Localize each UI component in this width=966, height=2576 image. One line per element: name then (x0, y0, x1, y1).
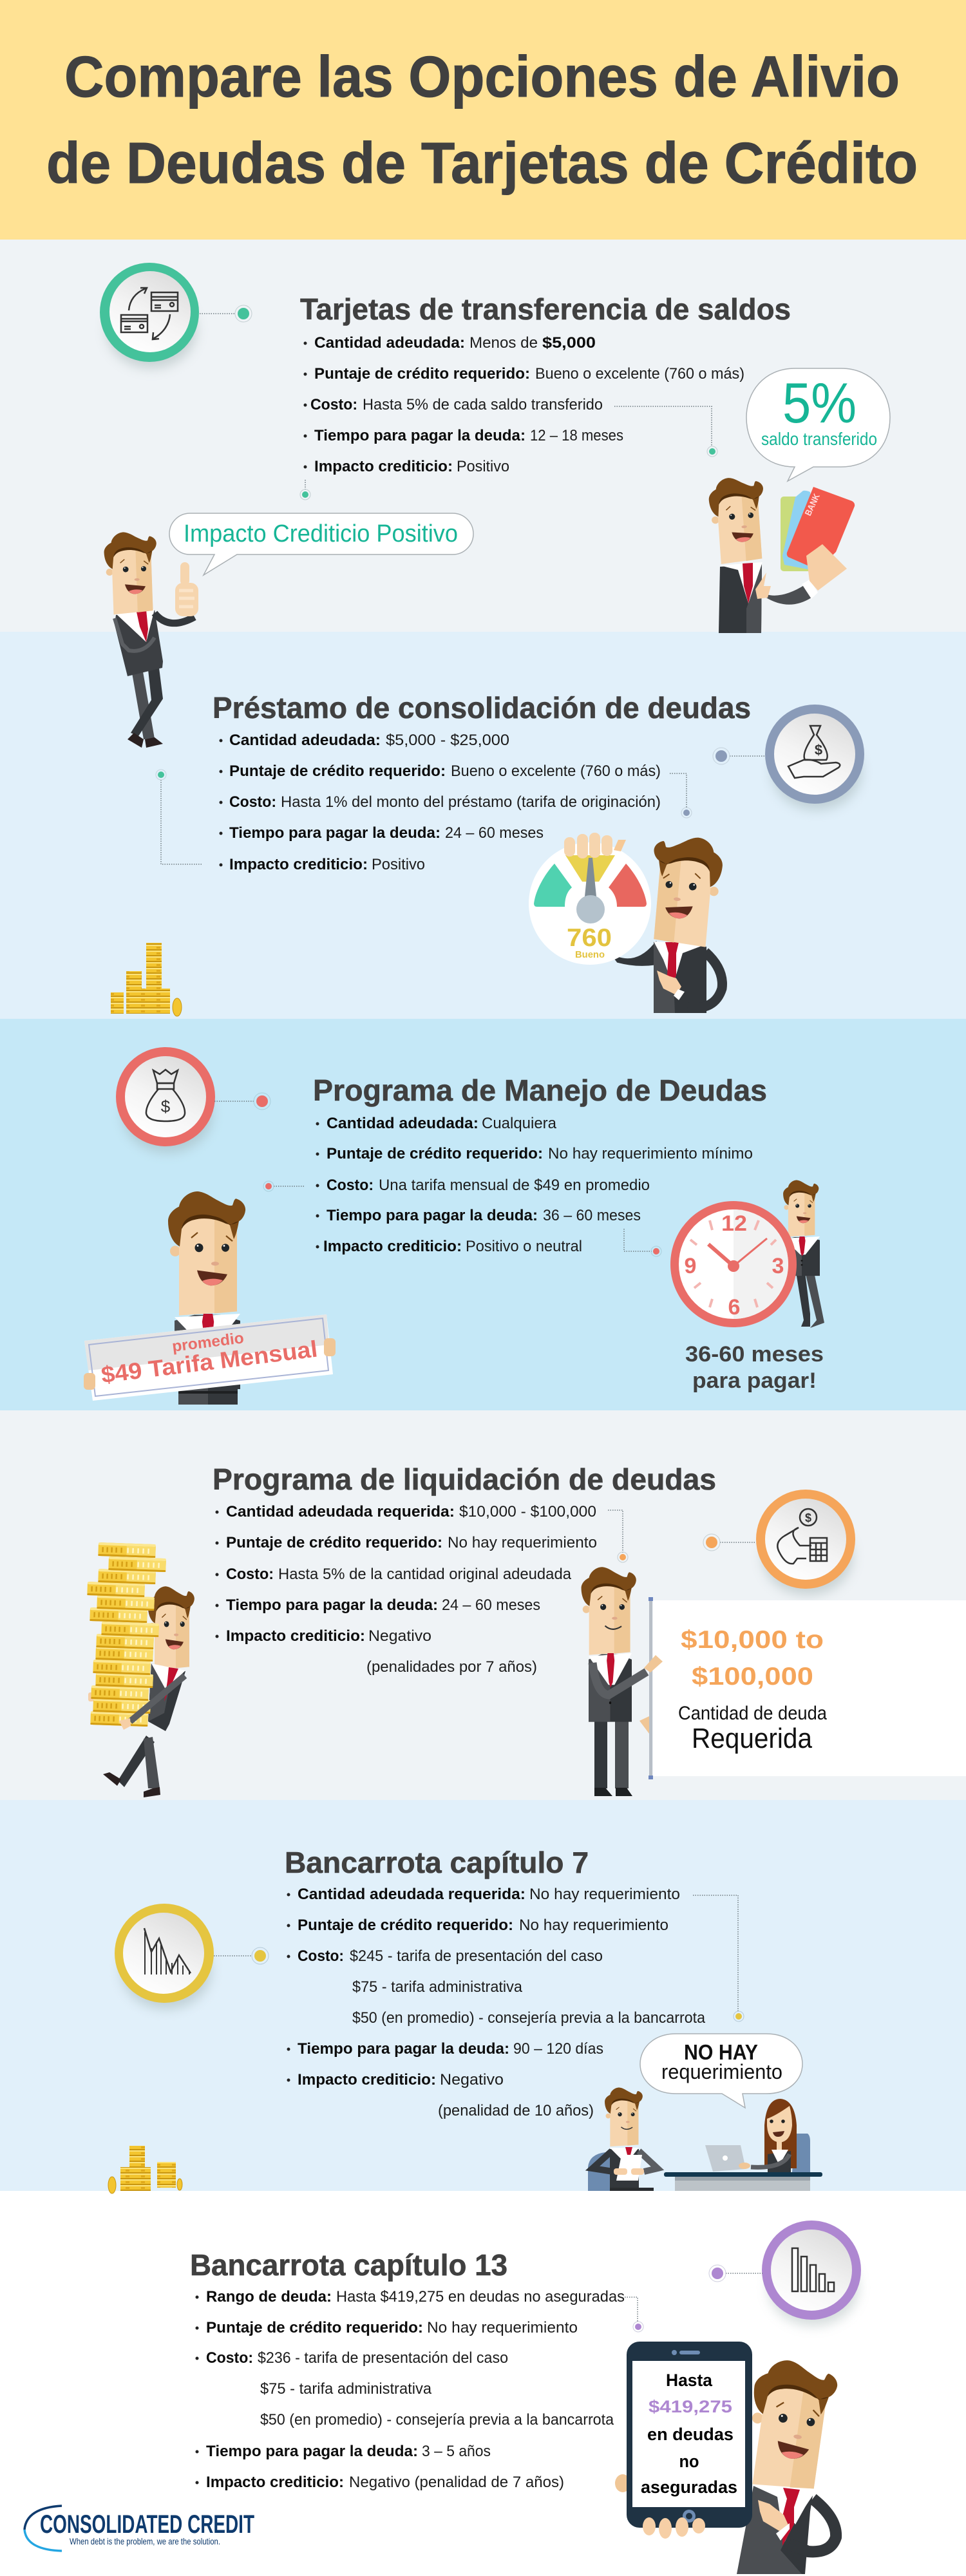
panel: bancarrota capítulo 7 (108, 1846, 822, 2193)
callout: no hay requerimiento (640, 2034, 802, 2108)
logo: Consolidated Credit (24, 2506, 254, 2551)
list: details: Una tarifa mensual de $49 en promedio (379, 1177, 650, 1194)
list: details: $50 (en promedio) - consejería previa a la bancarrota (352, 2009, 706, 2027)
list: details: Bueno o excelente (760 o más) (451, 762, 661, 780)
phone (615, 2342, 752, 2539)
character: man holding sign (168, 1191, 245, 1405)
gauge: credit score 760: 760 (567, 924, 612, 952)
list: details: Puntaje de crédito requerido: (327, 1145, 543, 1162)
logo: Consolidated Credit: When debt is the problem, we are the solution. (70, 2536, 220, 2546)
list: details (304, 334, 744, 475)
sign: $49 tarifa mensual (84, 1314, 336, 1401)
connector (200, 305, 252, 322)
coins stack (111, 943, 182, 1016)
list: details: Tiempo para pagar la deuda: (327, 1207, 538, 1224)
arm holding coins (119, 1676, 185, 1730)
callout: 5%: saldo transferido (761, 429, 877, 449)
heading: Préstamo de consolidación de deudas (213, 691, 751, 724)
list: details: Cantidad adeudada requerida: (226, 1503, 455, 1520)
list: details: Costo: (229, 793, 276, 811)
icon: bar chart (762, 2221, 861, 2326)
list: details: Tiempo para pagar la deuda: (229, 824, 440, 842)
list: details: Positivo (372, 856, 425, 873)
list: details: Impacto crediticio: (229, 856, 368, 873)
list: details: Hasta $419,275 en deudas no aseguradas (336, 2288, 625, 2306)
connector: impacto to bubble (300, 480, 310, 500)
character: man holding credit cards: BANK (802, 492, 822, 517)
list: details (196, 2288, 625, 2491)
list: details: Costo: (206, 2349, 253, 2367)
list: details: Puntaje de crédito requerido: (229, 762, 446, 780)
clock (670, 1201, 797, 1327)
list: details (215, 1503, 597, 1676)
character: man holding credit cards (708, 475, 855, 633)
list: details: Hasta 5% de la cantidad original adeudada (278, 1566, 572, 1583)
coin stack (87, 1542, 166, 1727)
logo: Consolidated Credit: CONSOLIDATED CREDIT (40, 2510, 254, 2539)
icon: piggy bank and calculator: $ (805, 1511, 811, 1524)
character: man with thumbs up (104, 531, 198, 748)
icon: falling chart (115, 1904, 214, 2009)
sign: amount required: Cantidad de deuda (678, 1703, 827, 1724)
heading: Programa de liquidación de deudas (213, 1463, 716, 1496)
callout: 5%: 5% (782, 371, 857, 435)
list: details: Tiempo para pagar la deuda: (226, 1596, 438, 1614)
connector: puntaje to gauge (670, 773, 692, 818)
list: details: 90 – 120 días (513, 2040, 603, 2058)
character: man presenting (582, 1567, 663, 1796)
list: details: Tiempo para pagar la deuda: (314, 427, 526, 444)
gauge: credit score 760: Bueno (575, 949, 605, 960)
connector: cantidad to sign (608, 1510, 628, 1562)
panel: préstamo de consolidación (111, 691, 864, 1016)
clock: 9 (685, 1254, 696, 1278)
list: details: Impacto crediticio: (226, 1627, 365, 1645)
list: details: Impacto crediticio: (298, 2071, 436, 2088)
connector: tiempo to clock (624, 1229, 661, 1256)
character: man seated (588, 2088, 658, 2191)
connector: impacto to man (156, 770, 202, 864)
character: man pointing at gauge (616, 834, 724, 1013)
clock: 6 (728, 1295, 740, 1320)
connector (703, 1534, 756, 1551)
phone: aseguradas (641, 2477, 737, 2497)
list: details: 24 – 60 meses (442, 1596, 540, 1614)
sign: amount required: Requerida (692, 1723, 812, 1754)
list: details: 36 – 60 meses (543, 1207, 641, 1224)
list: details: Impacto crediticio: (323, 1238, 462, 1255)
list: details: No hay requerimiento mínimo (548, 1145, 753, 1162)
list: details (316, 1115, 753, 1255)
list: details (287, 1886, 706, 2119)
panel: bancarrota capítulo 13 (24, 2221, 861, 2574)
panel: tarjetas de transferencia de saldos (100, 263, 890, 748)
phone: en deudas (647, 2425, 734, 2444)
list: details: Menos de (469, 334, 538, 352)
list: details: Positivo o neutral (466, 1238, 582, 1255)
list: details: Rango de deuda: (206, 2288, 332, 2306)
list: details: Costo: (327, 1177, 374, 1194)
list: details: Cantidad adeudada: (229, 732, 381, 749)
list: details: No hay requerimiento (448, 1534, 597, 1551)
list: details: 3 – 5 años (422, 2443, 491, 2460)
callout: impacto crediticio positivo: Impacto Crediticio Positivo (184, 520, 458, 547)
title: Compare las Opciones de Alivio (64, 45, 900, 109)
connector: costo (263, 1181, 305, 1191)
title (46, 45, 918, 196)
list: details: Puntaje de crédito requerido: (226, 1534, 442, 1551)
clock: 3 (772, 1254, 784, 1278)
list: details: No hay requerimiento (519, 1917, 668, 1934)
list: details (219, 732, 661, 873)
character: woman at desk (705, 2099, 810, 2172)
connector (709, 2265, 762, 2282)
sign: $49 tarifa mensual: $49 Tarifa Mensual (100, 1336, 319, 1388)
callout: no hay requerimiento: NO HAY (684, 2040, 758, 2064)
list: details: $245 - tarifa de presentación del caso (350, 1947, 603, 1965)
list: details: Negativo (penalidad de 7 años) (349, 2474, 564, 2491)
list: details: Puntaje de crédito requerido: (298, 1917, 513, 1934)
list: details: Puntaje de crédito requerido: (314, 365, 530, 383)
panel: header (0, 0, 966, 240)
panel: programa de manejo de deudas (84, 1047, 824, 1405)
list: details: No hay requerimiento (427, 2319, 578, 2336)
list: details: Puntaje de crédito requerido: (206, 2319, 423, 2336)
callout: 5% (746, 368, 890, 481)
list: details: $50 (en promedio) - consejería previa a la bancarrota (260, 2411, 614, 2429)
list: details: $5,000 (542, 334, 596, 352)
list: details: Cantidad adeudada: (314, 334, 465, 352)
sign: amount required: $10,000 to (681, 1626, 824, 1654)
list: details: $75 - tarifa administrativa (260, 2380, 432, 2398)
phone: Hasta (666, 2371, 713, 2390)
title: de Deudas de Tarjetas de Crédito (46, 131, 918, 196)
list: details: $10,000 - $100,000 (459, 1503, 596, 1520)
callout: impacto crediticio positivo (169, 513, 473, 575)
caption: 36-60 meses: 36-60 meses (685, 1342, 824, 1367)
sign: $49 tarifa mensual: promedio (171, 1329, 245, 1356)
list: details: Impacto crediticio: (206, 2474, 344, 2491)
icon: money bag: $ (161, 1097, 171, 1116)
icon: money bag (116, 1047, 215, 1153)
connector: cantidad to bubble (693, 1895, 744, 2022)
desk (664, 2172, 822, 2191)
list: details: Tiempo para pagar la deuda: (298, 2040, 509, 2058)
list: details: Positivo (457, 458, 509, 475)
heading: Bancarrota capítulo 13 (190, 2248, 507, 2282)
list: details: (penalidades por 7 años) (366, 1658, 537, 1676)
list: details: No hay requerimiento (529, 1886, 680, 1903)
icon: hand with money bag: $ (815, 742, 822, 758)
gauge: credit score 760 (529, 833, 651, 965)
list: details: Cantidad adeudada: (327, 1115, 478, 1132)
phone: $419,275 (649, 2397, 732, 2416)
list: details: $75 - tarifa administrativa (352, 1978, 523, 1996)
connector (214, 1947, 269, 1964)
heading: Programa de Manejo de Deudas (313, 1074, 767, 1107)
heading: Tarjetas de transferencia de saldos (300, 292, 791, 326)
sign: amount required: $100,000 (692, 1663, 813, 1690)
character: small man leaning on clock (783, 1180, 824, 1328)
panel: programa de liquidación (87, 1463, 966, 1797)
icon: card transfer (100, 263, 199, 368)
list: details: Cualquiera (482, 1115, 557, 1132)
caption: 36-60 meses: para pagar! (692, 1368, 817, 1393)
icon: piggy bank and calculator (756, 1490, 855, 1595)
heading: Bancarrota capítulo 7 (285, 1846, 589, 1879)
list: details: 24 – 60 meses (445, 824, 544, 842)
list: details: Tiempo para pagar la deuda: (206, 2443, 418, 2460)
list: details: Negativo (368, 1627, 431, 1645)
character: man with phone (737, 2356, 840, 2574)
sign: amount required (649, 1597, 966, 1779)
list: details: 12 – 18 meses (530, 427, 623, 444)
list: details: Impacto crediticio: (314, 458, 453, 475)
caption: 36-60 meses (685, 1342, 824, 1393)
list: details: Bueno o excelente (760 o más) (535, 365, 744, 383)
icon: hand with money bag (765, 705, 864, 810)
phone: no (679, 2452, 699, 2471)
coins stack (108, 2146, 182, 2193)
connector: rango to phone (625, 2297, 643, 2332)
character: man carrying coins (88, 1586, 194, 1797)
list: details: $236 - tarifa de presentación del caso (258, 2349, 508, 2367)
callout: no hay requerimiento: requerimiento (661, 2060, 782, 2083)
connector (713, 748, 765, 764)
list: details: Costo: (298, 1947, 344, 1965)
connector: costo to bubble (614, 406, 717, 457)
list: details: $5,000 - $25,000 (386, 732, 509, 749)
list: details: Negativo (440, 2071, 504, 2088)
connector (214, 1093, 270, 1110)
list: details: Costo: (226, 1566, 274, 1583)
list: details: Costo: (310, 396, 357, 413)
clock: 12 (721, 1211, 747, 1236)
list: details: Cantidad adeudada requerida: (298, 1886, 526, 1903)
list: details: Hasta 1% del monto del préstamo (tarifa de originación) (281, 793, 661, 811)
list: details: Hasta 5% de cada saldo transferido (363, 396, 603, 413)
list: details: (penalidad de 10 años) (438, 2102, 594, 2119)
